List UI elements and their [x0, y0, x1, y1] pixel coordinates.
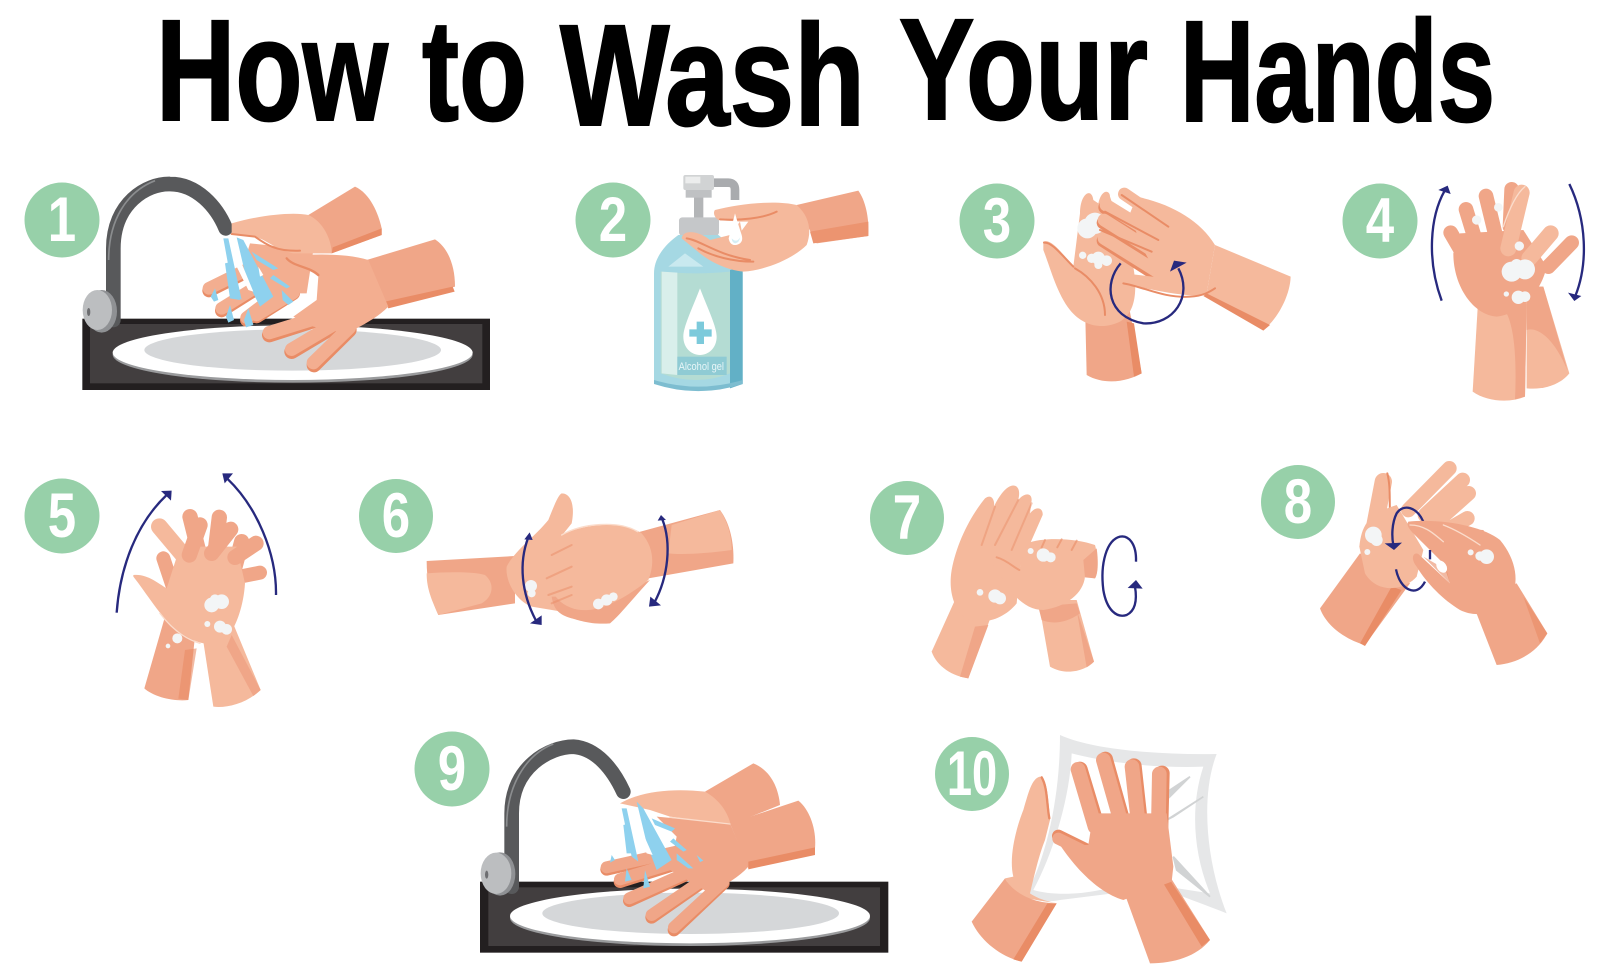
number badge 10: [935, 737, 1009, 811]
number badge 4: 4: [1366, 186, 1394, 256]
forearms: [144, 617, 261, 707]
alcohol gel bottle: Alcohol gel: [679, 361, 724, 373]
step 2: apply soap from pump bottle: [576, 175, 868, 391]
number badge 7: 7: [893, 483, 921, 553]
number badge 2: 2: [599, 185, 627, 255]
number badge 6: 6: [382, 481, 410, 551]
left forearm: [1320, 553, 1410, 646]
illustration: sink, faucet and hands: [82, 181, 490, 390]
soap foam: [1077, 213, 1112, 269]
left hand: [972, 777, 1057, 962]
number badge 9: [414, 732, 490, 806]
step 3: rub palm over back of hand: [960, 184, 1291, 381]
title: [156, 0, 1495, 156]
number badge 8: 8: [1284, 467, 1312, 537]
illustration: crossed hands with arrows: [117, 473, 276, 707]
step 8: clasp fingers over palm: [1261, 465, 1547, 665]
arrow right: [649, 515, 668, 607]
left hand with thumb: [506, 493, 573, 612]
illustration: clasped hands: [427, 493, 733, 625]
number badge 5: [24, 478, 100, 554]
hands and fingers: [133, 517, 260, 644]
open hand: [682, 191, 868, 272]
right forearm: [1470, 583, 1547, 665]
illustration: palm and fist: [932, 485, 1143, 678]
arrow right: [1568, 184, 1584, 301]
circular motion arrow: [1111, 261, 1187, 323]
number badge 10: 10: [947, 739, 997, 809]
arrow right: [222, 473, 276, 595]
step 7: rub fist in palm: [870, 481, 1143, 678]
illustration: bottle and hand: [654, 175, 868, 391]
step 1: wet hands under faucet: [24, 181, 490, 390]
step 6: clasped thumb rubbing: [359, 479, 733, 625]
step 10: dry hands with towel: [935, 735, 1227, 963]
left hand: [932, 485, 1043, 678]
arrow left: [523, 532, 542, 625]
step 4: rub fingers interlaced, back of hand: [1342, 184, 1584, 401]
soap foam: [1364, 527, 1494, 564]
number badge 3: [960, 184, 1034, 258]
soap foam: [166, 594, 232, 648]
sink counter: [82, 319, 490, 390]
interlaced fingers and palm: [1451, 187, 1572, 317]
soap foam: [977, 548, 1056, 604]
water stream: [610, 802, 703, 888]
front hand: [269, 239, 455, 365]
paper towel: [1027, 735, 1227, 913]
step 9: rinse hands: [414, 732, 888, 953]
forearms: [427, 510, 733, 615]
faucet: [481, 744, 623, 896]
right fist: [547, 524, 652, 624]
number badge 6: [359, 479, 433, 553]
illustration: overlapping hands: [1043, 192, 1291, 381]
step 5: rub back of fingers: [24, 473, 276, 707]
right hand: [1408, 521, 1516, 614]
number badge 4: [1342, 184, 1418, 258]
rear hand: [209, 187, 382, 320]
rear hand: [620, 763, 780, 825]
right hand: [1058, 759, 1210, 963]
sink counter: [480, 882, 888, 953]
front hand and fingers: [607, 801, 815, 930]
arrow left: [117, 491, 172, 613]
basin: [510, 889, 870, 946]
number badge 7: [870, 481, 944, 555]
pump head: [679, 175, 735, 236]
right forearm: [1038, 600, 1094, 672]
basin: [113, 325, 473, 383]
illustration: hands with foam and arrows: [1432, 184, 1584, 401]
number badge 2: [576, 182, 650, 258]
forearms: [1473, 287, 1569, 401]
arrow rear part: [1385, 508, 1425, 591]
number badge 8: [1261, 465, 1335, 539]
illustration: sink, faucet and hands: [480, 744, 888, 953]
faucet: [83, 181, 226, 333]
soap foam: [1472, 203, 1535, 304]
lower hand: [1043, 192, 1142, 381]
illustration: towel and hands: [972, 735, 1227, 963]
illustration: hands with fingers rotating: [1320, 468, 1547, 665]
water stream: [211, 237, 293, 327]
upper hand: [1100, 194, 1291, 331]
number badge 1: 1: [48, 185, 76, 255]
number badge 9: 9: [438, 734, 466, 804]
number badge 1: [24, 182, 100, 258]
arrow left: [1432, 186, 1451, 301]
arrow front segment: [1426, 550, 1433, 559]
circular arrow: [1102, 536, 1143, 616]
right fist: [992, 539, 1098, 610]
soap foam: [525, 580, 618, 609]
alcohol gel bottle: [654, 235, 743, 391]
left hand and fingers: [1359, 468, 1469, 588]
number badge 5: 5: [48, 481, 76, 551]
number badge 3: 3: [983, 186, 1011, 256]
